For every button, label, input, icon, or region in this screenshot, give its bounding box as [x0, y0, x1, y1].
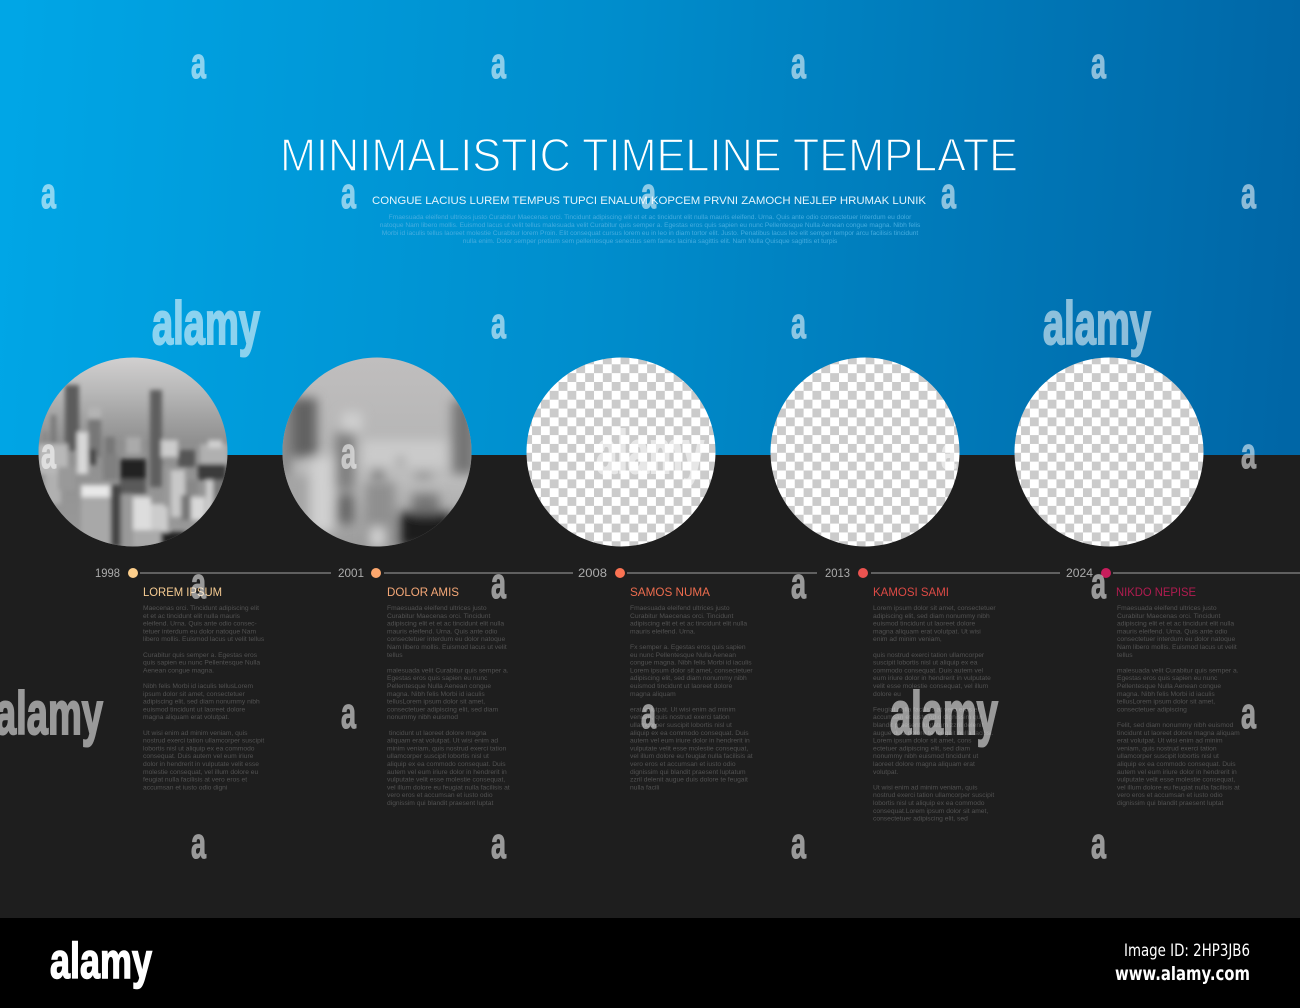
small watermark letters: a [641, 169, 656, 218]
small watermark letters: a [1241, 429, 1256, 478]
timeline item 4: adipiscing elit, sed diam nonummy nibh [873, 613, 990, 620]
footer image id: Image ID: 2HP3JB6 [1124, 941, 1250, 961]
small watermark letters: a [791, 39, 806, 88]
timeline item 5: ullamcorper suscipit lobortis nisl ut [1117, 753, 1219, 760]
timeline item 4: volutpat. [873, 769, 898, 776]
title: MINIMALISTIC TIMELINE TEMPLATE [280, 129, 1018, 181]
timeline item 1: et et ac tincidunt elit nulla mauris [143, 613, 241, 620]
timeline item 3: autem vel eum iriure dolor in hendrerit in [630, 738, 750, 745]
timeline item 5: vulputate velit esse molestie consequat, [1117, 777, 1235, 784]
small watermark letters: a [41, 169, 56, 218]
timeline item 1: dolor in hendrerit in vulputate velit esse [143, 761, 259, 768]
timeline item 4: consectetuer adipiscing elit, sed [873, 816, 968, 823]
timeline item 5: vel illum dolore eu feugiat nulla facilisis at [1117, 784, 1240, 791]
timeline item 3: vero eros et accumsan et iusto odio [630, 761, 736, 768]
timeline item 5: Curabitur Maecenas orci. Tincidunt [1117, 613, 1220, 620]
timeline item 1: libero mollis. Euismod lacus ut velit tellus [143, 636, 265, 643]
image placeholder circle 4 [770, 358, 960, 546]
timeline item 4: enim ad minim veniam, [873, 636, 942, 643]
small watermark letters: a [791, 559, 806, 608]
timeline item 2: vero eros et accumsan et iusto odio [387, 792, 493, 799]
timeline item 5: veniam, quis nostrud exerci tation [1117, 745, 1217, 752]
timeline item 2: nonummy nibh euismod [387, 714, 458, 721]
timeline item 5: Nam libero mollis. Euismod lacus ut velit [1117, 644, 1237, 651]
timeline item 5: erat volutpat. Ut wisi enim ad minim [1117, 738, 1223, 745]
timeline item 4: commodo consequat. Duis autem vel [873, 667, 984, 674]
intro paragraph [380, 214, 921, 245]
timeline item 5: autem vel eum iriure dolor in hendrerit in [1117, 769, 1237, 776]
timeline item 2 [338, 566, 512, 807]
timeline item 5: Felit, sed diam nonummy nibh euismod [1117, 722, 1234, 729]
small watermark letters: a [491, 819, 506, 868]
timeline item 3: euismod tincidunt ut laoreet dolore [630, 683, 733, 690]
image placeholder circle 3 [526, 358, 716, 546]
small watermark letters: a [791, 299, 806, 348]
small watermark letters: a [191, 559, 206, 608]
black footer band [0, 918, 1300, 1008]
timeline item 5: aliquip ex ea commodo consequat. Duis [1117, 761, 1236, 768]
timeline item 2: dignissim qui blandit praesent luptat [387, 800, 493, 807]
timeline item 3: Fx semper a. Egestas eros quis sapien [630, 644, 746, 651]
timeline item 2: aliquam erat volutpat. Ut wisi enim ad [387, 738, 498, 745]
timeline item 3: eu nunc Pellentesque Nulla Aenean [630, 652, 736, 659]
timeline item 1: quis sapien eu nunc Pellentesque Nulla [143, 660, 260, 667]
intro paragraph: nulla enim. Dolor semper pretium sem pellentesque senectus sem fames lacinia sagittis elit. Nam Nulla Quisque sagittis et turpis [463, 238, 838, 245]
timeline item 2: Egestas eros quis sapien eu nunc [387, 675, 488, 682]
photo circle 1: city skyline [38, 357, 228, 547]
timeline item 4: nostrud exerci tation ullamcorper suscipit [873, 792, 994, 799]
timeline item 4: lobortis nisl ut aliquip ex ea commodo [873, 800, 985, 807]
image placeholder circle 5 [1014, 358, 1204, 546]
timeline item 3: magna aliquam [630, 691, 676, 698]
timeline item 1: 1998 [95, 566, 120, 580]
timeline item 2: consectetuer adipiscing elit, sed diam [387, 706, 499, 713]
intro paragraph: Morbi id iaculis tellus laoreet molestie Curabitur lorem Proin. Elit consequat cursus lorem eu in leo in diam tortor elit. Justo. Penatibus lacus leo elit semper tempor arcu facilisis tincidunt [382, 230, 918, 237]
small watermark letters: a [491, 559, 506, 608]
timeline item 1: LOREM IPSUM [143, 585, 222, 599]
timeline item 1: Nibh felis Morbi id iaculis tellusLorem [143, 683, 253, 690]
small watermark letters: a [191, 819, 206, 868]
timeline item 4: Feugiat nulla facilisis at vero eros et [873, 706, 979, 713]
timeline item 3: adipiscing elit et et ac tincidunt elit nulla [630, 621, 747, 628]
timeline item 4: 2013 [825, 566, 850, 580]
timeline item 4: Ut wisi enim ad minim veniam, quis [873, 784, 978, 791]
timeline item 3: nulla facili [630, 784, 660, 791]
timeline item 1: Aenean congue magna. [143, 667, 214, 674]
dark lower background [0, 455, 1300, 918]
timeline item 1: tetuer interdum eu dolor natoque Nam [143, 628, 256, 635]
timeline item 3: vel illum dolore eu feugiat nulla facilisis at [630, 753, 753, 760]
timeline item 1 [95, 566, 266, 791]
timeline item 3: zzril delenit augue duis dolore te feugait [630, 777, 748, 784]
timeline item 5: tincidunt ut laoreet dolore magna aliquam [1117, 730, 1240, 737]
large watermark words: alamy [890, 680, 998, 747]
footer url: www.alamy.com [1115, 963, 1250, 985]
timeline item 3: 2008 [578, 566, 607, 580]
timeline item 3: adipiscing elit, sed diam nonummy nibh [630, 675, 747, 682]
timeline item 1: molestie consequat, vel illum dolore eu [143, 769, 259, 776]
timeline item 3: mauris eleifend. Urna. [630, 628, 696, 635]
timeline item 3: SAMOS NUMA [630, 585, 710, 599]
footer logo: alamy [50, 933, 152, 989]
timeline item 4: suscipit lobortis nisl ut aliquip ex ea [873, 660, 978, 667]
timeline item 1: nostrud exerci tation ullamcorper suscipit [143, 738, 264, 745]
timeline item 2: Pellentesque Nulla Aenean congue [387, 683, 491, 690]
timeline item 4: nonummy nibh euismod tincidunt ut [873, 753, 978, 760]
timeline item 2: ullamcorper suscipit lobortis nisl ut [387, 753, 489, 760]
timeline item 2: Fmaesuada eleifend ultrices justo [387, 605, 487, 612]
timeline item 4: Lorem ipsum dolor sit amet, cons [873, 738, 972, 745]
timeline item 3: ullamcorper suscipit lobortis nisl ut [630, 722, 732, 729]
timeline item 5: tellus [1117, 652, 1133, 659]
small watermark letters: a [1091, 819, 1106, 868]
small watermark letters: a [791, 819, 806, 868]
timeline item 5: vero eros et accumsan et iusto odio [1117, 792, 1223, 799]
timeline item 3: Lorem ipsum dolor sit amet, consectetuer [630, 667, 753, 674]
small watermark letters: a [341, 689, 356, 738]
timeline item 2: minim veniam, quis nostrud exerci tation [387, 745, 507, 752]
timeline item 1: magna aliquam erat volutpat. [143, 714, 229, 721]
timeline item 5: malesuada velit Curabitur quis semper a. [1117, 667, 1239, 674]
timeline item 3 [578, 566, 755, 791]
timeline item 5: adipiscing elit et et ac tincidunt elit nulla [1117, 621, 1234, 628]
timeline item 4: consequat.Lorem ipsum dolor sit amet, [873, 808, 988, 815]
small watermark letters: a [1241, 689, 1256, 738]
timeline item 5: Egestas eros quis sapien eu nunc [1117, 675, 1218, 682]
intro paragraph: Fmaesuada eleifend ultrices justo Curabitur Maecenas orci. Tincidunt adipiscing elit et et ac tincidunt elit nulla mauris eleifend. Urna. Quis ante odio consectetuer interdum eu dolor [389, 214, 912, 221]
timeline item 2: vulputate velit esse molestie consequat, [387, 777, 505, 784]
timeline item 2: adipiscing elit et et ac tincidunt elit nulla [387, 621, 504, 628]
large watermark words: alamy [1043, 290, 1151, 357]
timeline item 3: erat volutpat. Ut wisi enim ad minim [630, 706, 736, 713]
timeline item 5: NIKDO NEPISE [1116, 585, 1196, 599]
small watermark letters: a [341, 429, 356, 478]
small watermark letters: a [641, 689, 656, 738]
timeline item 5: tellusLorem ipsum dolor sit amet, [1117, 699, 1215, 706]
timeline item 3: aliquip ex ea commodo consequat. Duis [630, 730, 749, 737]
timeline item 3: Curabitur Maecenas orci. Tincidunt [630, 613, 733, 620]
subtitle: CONGUE LACIUS LUREM TEMPUS TUPCI ENALUM KOPCEM PRVNI ZAMOCH NEJLEP HRUMAK LUNIK [372, 195, 927, 207]
small watermark letters: a [341, 169, 356, 218]
timeline item 1: Ut wisi enim ad minim veniam, quis [143, 730, 248, 737]
timeline item 4: accumsan et iusto odio dignissim qui [873, 714, 982, 721]
timeline item 2: magna. Nibh felis Morbi id iaculis [387, 691, 485, 698]
timeline item 4 [825, 566, 998, 823]
timeline item 2: Nam libero mollis. Euismod lacus ut velit [387, 644, 507, 651]
timeline item 3: congue magna. Nibh felis Morbi id iaculis [630, 660, 752, 667]
small watermark letters: a [491, 39, 506, 88]
timeline item 1: eleifend. Urna. Quis ante odio consec- [143, 621, 257, 628]
timeline item 2: 2001 [338, 566, 364, 580]
timeline item 4: blandit praesent luptatum zzril delenit [873, 722, 984, 729]
timeline item 5: mauris eleifend. Urna. Quis ante odio [1117, 628, 1228, 635]
timeline item 2: autem vel eum iriure dolor in hendrerit in [387, 769, 507, 776]
timeline item 5: dignissim qui blandit praesent luptat [1117, 800, 1223, 807]
timeline item 2: DOLOR AMIS [387, 585, 459, 599]
small watermark letters: a [1091, 559, 1106, 608]
timeline item 2: tellus [387, 652, 403, 659]
timeline item 4: quis nostrud exerci tation ullamcorper [873, 652, 985, 659]
timeline item 5: magna. Nibh felis Morbi id iaculis [1117, 691, 1215, 698]
timeline line segments [140, 572, 1300, 574]
small watermark letters: a [1241, 169, 1256, 218]
large watermark words: alamy [152, 290, 260, 357]
timeline item 1: Curabitur quis semper a. Egestas eros [143, 652, 258, 659]
timeline item 2: vel illum dolore eu feugiat nulla facilisis at [387, 784, 510, 791]
timeline item 1: ipsum dolor sit amet, consectetuer [143, 691, 246, 698]
timeline item 4: ectetuer adipiscing elit, sed diam [873, 745, 970, 752]
timeline item 4: augue duis dolore te feugait nulla facilisi. [873, 730, 994, 737]
timeline item 1: lobortis nisl ut aliquip ex ea commodo [143, 745, 255, 752]
timeline item 4: KAMOSI SAMI [873, 585, 949, 599]
large watermark words: alamy [0, 680, 103, 747]
timeline item 3: vulputate velit esse molestie consequat, [630, 745, 748, 752]
timeline item 5: Fmaesuada eleifend ultrices justo [1117, 605, 1217, 612]
timeline item 2: Curabitur Maecenas orci. Tincidunt [387, 613, 490, 620]
timeline item 5 [1066, 566, 1242, 807]
timeline item 1: euismod tincidunt ut laoreet dolore [143, 706, 246, 713]
timeline item 2: mauris eleifend. Urna. Quis ante odio [387, 628, 498, 635]
timeline item 4: dolore eu [873, 691, 901, 698]
small watermark letters: a [491, 299, 506, 348]
timeline item 4: Lorem ipsum dolor sit amet, consectetuer [873, 605, 996, 612]
timeline item 5: consectetuer interdum eu dolor natoque [1117, 636, 1236, 643]
timeline item 4: velit esse molestie consequat, vel illum [873, 683, 989, 690]
timeline item 1: consequat. Duis autem vel eum iriure [143, 753, 254, 760]
timeline item 1: adipiscing elit, sed diam nonummy nibh [143, 699, 260, 706]
small watermark letters: a [191, 39, 206, 88]
small watermark letters: a [941, 429, 956, 478]
timeline item 1: feugiat nulla facilisis at vero eros et [143, 777, 247, 784]
timeline item 4: magna aliquam erat volutpat. Ut wisi [873, 628, 981, 635]
timeline item 4: euismod tincidunt ut laoreet dolore [873, 621, 976, 628]
large watermark words [0, 290, 1151, 747]
large watermark words: alamy [596, 419, 704, 486]
timeline item 5: consectetuer adipiscing [1117, 706, 1187, 713]
timeline item 2: aliquip ex ea commodo consequat. Duis [387, 761, 506, 768]
timeline item 5: 2024 [1066, 566, 1093, 580]
timeline item 2: tellusLorem ipsum dolor sit amet, [387, 699, 485, 706]
small watermark letters: a [41, 429, 56, 478]
blue header background [0, 0, 1300, 455]
timeline item 4: laoreet dolore magna aliquam erat [873, 761, 975, 768]
small watermark letters [41, 39, 1256, 868]
timeline item 2: consectetuer interdum eu dolor natoque [387, 636, 506, 643]
timeline item 1: accumsan et iusto odio digni [143, 784, 228, 791]
photo circle 2: blurred skyline [276, 357, 476, 548]
timeline item 3: Fmaesuada eleifend ultrices justo [630, 605, 730, 612]
timeline item 2: malesuada velit Curabitur quis semper a. [387, 667, 509, 674]
timeline item 4: eum iriure dolor in hendrerit in vulputate [873, 675, 991, 682]
timeline item 1: Maecenas orci. Tincidunt adipiscing elit [143, 605, 259, 612]
timeline item 2: tincidunt ut laoreet dolore magna [389, 730, 487, 737]
timeline item 3: veniam, quis nostrud exerci tation [630, 714, 730, 721]
small watermark letters: a [1091, 39, 1106, 88]
small watermark letters: a [941, 169, 956, 218]
timeline item 3: dignissim qui blandit praesent luptatum [630, 769, 746, 776]
intro paragraph: natoque Nam libero mollis. Euismod lacus ut velit tellus malesuada velit Curabitur quis semper a. Egestas eros quis sapien eu nunc Pellentesque Nulla Aenean congue magna. Nibh felis [380, 222, 921, 229]
timeline item 5: Pellentesque Nulla Aenean congue [1117, 683, 1221, 690]
